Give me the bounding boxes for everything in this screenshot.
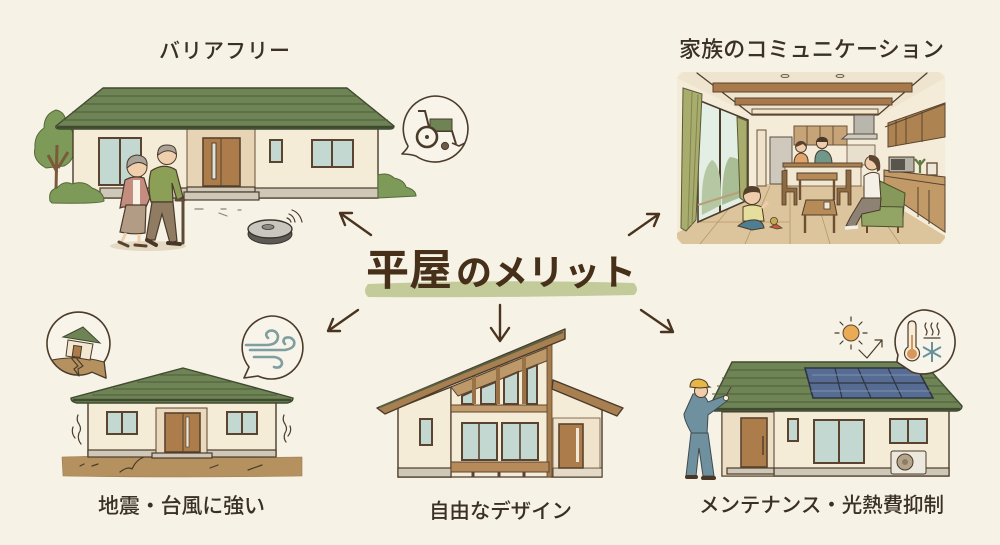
elderly woman (119, 155, 150, 246)
door (741, 418, 767, 467)
shed roof (377, 329, 565, 414)
panel: maintenance and energy house (684, 310, 962, 478)
coffee table (802, 200, 837, 233)
icon: wind bubble (242, 316, 303, 379)
back door (757, 130, 766, 186)
timber posts and beam (451, 345, 552, 477)
room background (677, 72, 945, 244)
arrow: to family communication (629, 214, 659, 235)
curtains (681, 88, 747, 231)
entrance door (553, 418, 600, 468)
tree (34, 110, 74, 190)
worker (684, 379, 731, 478)
windows (788, 419, 927, 463)
seated mother (845, 155, 881, 228)
plant and frame (915, 159, 937, 175)
deck (451, 462, 549, 477)
title: のメリット (456, 252, 636, 293)
title: 平屋 (366, 247, 452, 295)
shadow under couple (110, 241, 186, 251)
wall (88, 400, 276, 456)
panel: barrier free house (34, 88, 468, 251)
panel: earthquake and typhoon house (47, 312, 303, 477)
sliding window (698, 100, 748, 222)
windows (99, 138, 353, 185)
panel: free design house (377, 329, 623, 477)
door (203, 138, 240, 186)
heading: earthquake and typhoon: 地震・台風に強い (98, 495, 265, 518)
wall and plinth (73, 126, 378, 198)
wall (722, 408, 949, 476)
small window (420, 419, 432, 445)
floor boards (700, 186, 900, 244)
main wall and lean-to (398, 347, 602, 477)
air conditioner (891, 451, 926, 474)
dining set (782, 170, 851, 205)
microwave (889, 157, 914, 172)
elderly man with cane (146, 145, 184, 245)
panel: family communication interior (677, 72, 945, 244)
arrow: to barrier-free (340, 213, 371, 235)
arrow: to earthquake resistance (328, 310, 358, 331)
kitchen counter (783, 163, 862, 186)
arrow: energy check (859, 340, 882, 358)
entry (152, 408, 212, 458)
heading: barrier free: バリアフリー (159, 40, 290, 63)
fridge (770, 137, 792, 184)
icon: wheelchair bubble (402, 96, 468, 162)
right upper cabinets (885, 103, 945, 147)
upper tall windows (462, 365, 537, 404)
ceiling (697, 73, 927, 115)
floor (677, 184, 945, 244)
person in kitchen: man (815, 137, 832, 164)
icon: temperature bubble (895, 310, 955, 374)
ground crack (80, 457, 262, 472)
steps (184, 187, 259, 200)
ground (62, 456, 302, 477)
shake marks (72, 415, 291, 444)
bushes (50, 174, 416, 203)
plinth (774, 468, 949, 476)
roof (71, 368, 293, 403)
floor marks (195, 209, 241, 216)
arrow: to free design (491, 305, 509, 341)
solar panels (805, 368, 933, 398)
roof (56, 88, 394, 129)
kitchen back cabinets (794, 126, 875, 165)
icon: sun (835, 317, 867, 349)
right kitchen counter (884, 170, 945, 232)
icon: earthquake bubble (47, 312, 110, 378)
robot vacuum (248, 210, 302, 244)
porch (722, 412, 774, 476)
heading: maintenance and energy saving: メンテナンス・光熱費抑制 (699, 494, 944, 517)
roof (710, 362, 962, 411)
playing child (738, 186, 768, 230)
windows (107, 412, 257, 434)
large windows (462, 423, 538, 460)
ceiling tint (677, 72, 945, 115)
title underline (365, 281, 637, 297)
person in kitchen: woman (794, 141, 808, 164)
heading: free design: 自由なデザイン (429, 499, 572, 523)
plinth (88, 450, 276, 457)
lower roof (552, 380, 623, 416)
arrow: to maintenance (641, 310, 673, 332)
toys (770, 217, 782, 229)
heading: family communication: 家族のコミュニケーション (679, 37, 944, 62)
sofa (861, 181, 905, 233)
range hood (842, 115, 877, 139)
